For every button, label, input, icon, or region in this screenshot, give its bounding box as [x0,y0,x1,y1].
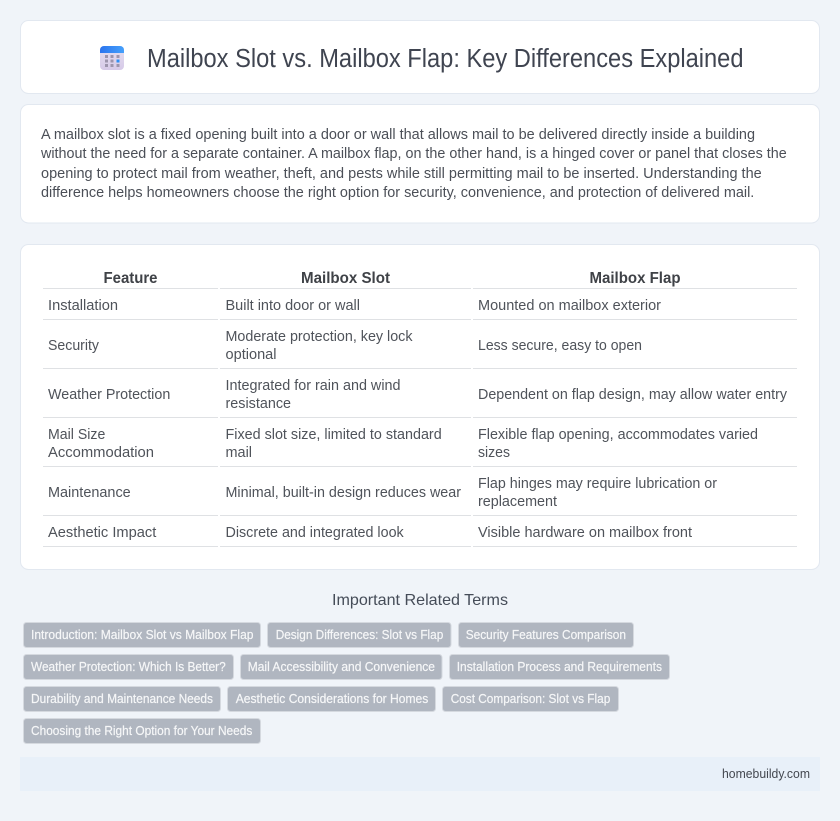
icon: calendar grid [100,46,124,70]
row: security: Less secure, easy to open [478,338,642,354]
related term tags: Cost Comparison: Slot vs Flap [451,692,610,706]
row: installation: Installation [48,298,118,314]
table header row: Mailbox Slot [301,270,390,287]
related term tags: Durability and Maintenance Needs [31,692,213,706]
related term tags: Choosing the Right Option for Your Needs [31,724,252,738]
panel: title header [20,20,820,94]
table header row: Mailbox Flap [590,270,680,287]
panel: introduction text: without the need for a separate container. A mailbox flap, on the other hand, is a hinged cover or panel that closes the [40,146,787,162]
related term tags: Aesthetic Considerations for Homes [236,692,428,706]
table header row: Feature [104,270,158,287]
row: aesthetic impact [48,525,692,541]
row: mail size accommodation [48,427,758,461]
panel: introduction text [20,104,820,223]
row: installation: Built into door or wall [226,298,360,314]
row: weather protection: Integrated for rain and wind [226,378,400,394]
row: security: Security [48,338,100,354]
panel: introduction text: opening to protect mail from weather, theft, and pests while still permitting mail to be inserted. Understanding the [41,166,762,182]
row: security: Moderate protection, key lock [226,329,413,345]
table header row [104,270,680,287]
row: maintenance: Minimal, built-in design reduces wear [226,485,461,501]
row: mail size accommodation: Fixed slot size, limited to standard [226,427,442,443]
row: installation: Mounted on mailbox exterior [478,298,661,314]
row: weather protection [48,378,788,412]
row: aesthetic impact: Discrete and integrated look [226,525,404,541]
row: aesthetic impact: Visible hardware on mailbox front [478,525,692,541]
row: weather protection: Dependent on flap design, may allow water entry [478,387,788,403]
footer: homebuildy.com [722,767,810,781]
footer [20,757,820,791]
row: maintenance: Flap hinges may require lubrication or [478,476,717,492]
row: weather protection: Weather Protection [48,387,170,403]
panel: introduction text: A mailbox slot is a fixed opening built into a door or wall that allows mail to be delivered directly inside a building [41,127,755,143]
row: mail size accommodation: Flexible flap opening, accommodates varied [478,427,758,443]
heading: important related terms: Important Related Terms [332,592,508,609]
panel: comparison table [20,244,820,570]
row: security: optional [226,347,276,363]
related term tags: Security Features Comparison [466,628,626,642]
panel: introduction text: difference helps homeowners choose the right option for security, convenience, and protection of delivered mail. [41,185,754,201]
related term tags [24,622,670,744]
row: installation [48,298,661,314]
related term tags: Installation Process and Requirements [457,660,662,674]
related term tags: Weather Protection: Which Is Better? [31,660,226,674]
row: mail size accommodation: Mail Size [48,427,105,443]
row: mail size accommodation: Accommodation [48,445,154,461]
related term tags: Mail Accessibility and Convenience [248,660,435,674]
row: mail size accommodation: mail [226,445,252,461]
row: mail size accommodation: sizes [478,445,510,461]
row: maintenance [48,476,717,510]
row: security [48,329,642,363]
row: maintenance: Maintenance [48,485,131,501]
related term tags: Design Differences: Slot vs Flap [276,628,443,642]
title: Mailbox Slot vs. Mailbox Flap: Key Differences Explained [147,45,744,73]
row: maintenance: replacement [478,494,557,510]
row: aesthetic impact: Aesthetic Impact [48,525,156,541]
row: weather protection: resistance [226,396,291,412]
related term tags: Introduction: Mailbox Slot vs Mailbox Flap [31,628,254,642]
